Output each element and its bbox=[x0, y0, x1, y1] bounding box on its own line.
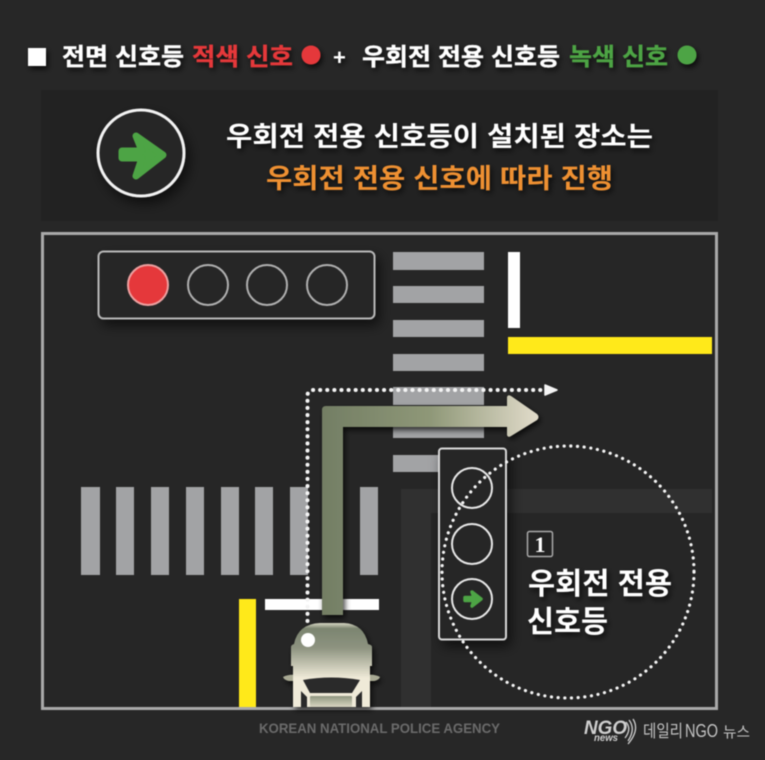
lamp: off 3 bbox=[307, 265, 347, 305]
car mirrors bbox=[283, 675, 380, 681]
centre line: bottom yellow bbox=[239, 599, 256, 707]
car hood bbox=[310, 696, 352, 707]
callout number badge: 1 bbox=[534, 532, 546, 557]
footer: NGO news logo bbox=[584, 718, 750, 744]
crosswalk: horizontal row bbox=[81, 487, 378, 575]
logo wordmark NGO: NGO bbox=[584, 718, 627, 739]
car body bbox=[291, 623, 372, 707]
panel: rule banner bbox=[41, 90, 718, 221]
banner text line 1: 우회전 전용 신호등이 설치된 장소는 bbox=[226, 122, 653, 152]
car side windows bbox=[301, 691, 362, 707]
title: right-turn signal: 우회전 전용 신호등 bbox=[362, 44, 560, 71]
logo site name: daily: 데일리 bbox=[643, 722, 683, 741]
callout number badge bbox=[528, 532, 552, 557]
car roof light bbox=[301, 633, 315, 647]
car bbox=[283, 623, 380, 707]
traffic signal: horizontal bbox=[98, 252, 374, 318]
lamp: middle bbox=[452, 524, 492, 564]
callout label bbox=[527, 568, 672, 639]
logo wordmark news: news bbox=[594, 733, 618, 744]
stop line: top bbox=[508, 252, 520, 328]
lamp: top bbox=[452, 468, 492, 508]
centre line: top yellow bbox=[508, 337, 712, 354]
callout label line 2: 신호등 bbox=[527, 606, 608, 639]
panel: intersection diagram bbox=[42, 234, 716, 708]
icon: red dot bbox=[302, 46, 320, 64]
crosswalk: vertical stack bbox=[393, 252, 484, 472]
title: green signal: 녹색 신호 bbox=[569, 44, 668, 71]
icon: green dot bbox=[678, 46, 696, 64]
dotted callout circle bbox=[442, 446, 694, 698]
banner text line 2: 우회전 전용 신호에 따라 진행 bbox=[266, 164, 613, 194]
title bbox=[28, 44, 696, 71]
plus sign: + bbox=[333, 45, 346, 70]
lamp: off 2 bbox=[247, 265, 287, 305]
car windshield bbox=[303, 678, 360, 693]
footer: agency name: KOREAN NATIONAL POLICE AGENCY bbox=[259, 720, 501, 736]
title: red signal: 적색 신호 bbox=[192, 44, 293, 71]
turn arrow bbox=[322, 395, 538, 615]
traffic signal: vertical right-turn bbox=[439, 448, 506, 640]
logo site name: NGO: NGO bbox=[685, 721, 718, 741]
icon: green arrow signal bbox=[98, 110, 184, 196]
logo waves bbox=[625, 719, 636, 744]
lamp: off 1 bbox=[188, 265, 228, 305]
lamp: green arrow bbox=[452, 579, 492, 619]
stop line: bottom bbox=[265, 599, 379, 610]
lamp: red lit bbox=[128, 265, 168, 305]
logo site name: news: 뉴스 bbox=[723, 724, 750, 741]
callout label line 1: 우회전 전용 bbox=[528, 568, 672, 601]
dotted route arrow bbox=[308, 385, 557, 621]
title: front signal: 전면 신호등 bbox=[62, 44, 184, 71]
road surface bbox=[401, 489, 712, 707]
title bullet bbox=[28, 48, 46, 66]
